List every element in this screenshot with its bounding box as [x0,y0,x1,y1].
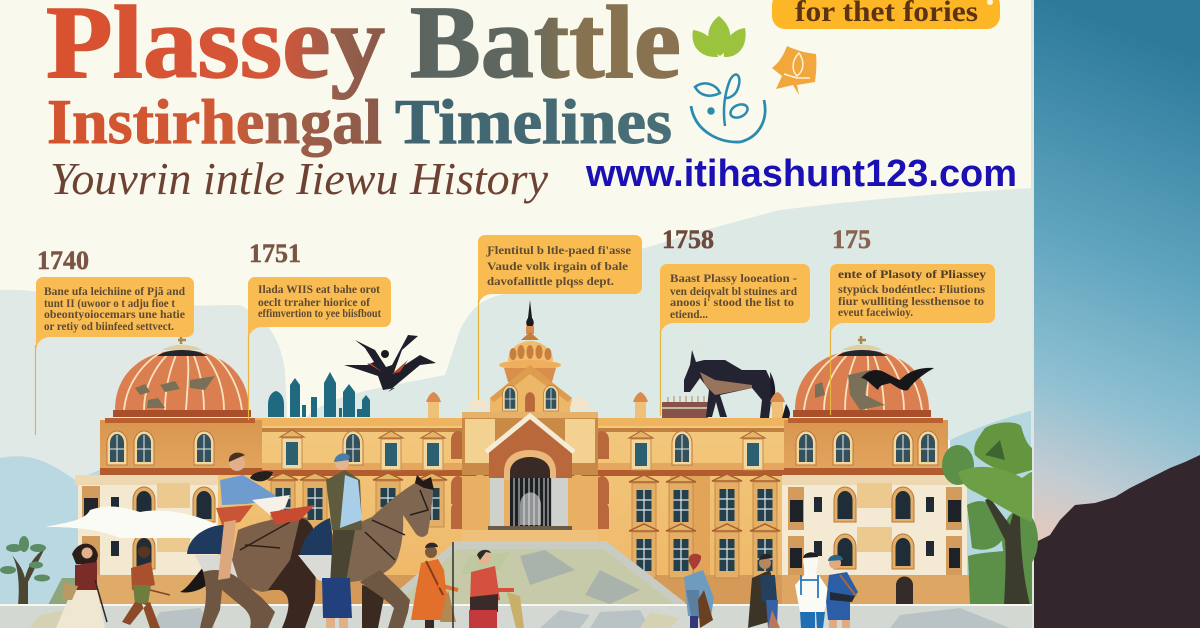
dark dragon bird [344,335,436,392]
callout 1758: ven deiqvalt bl stuines ard [670,284,797,298]
callout 1758: etiend... [670,307,708,321]
callout 1758: anoos i' stood the list to [670,295,794,309]
icon: green leaves [692,16,746,57]
figure: blue outfit man [826,555,858,628]
left dome [113,336,251,417]
callout 1751: effimvertion to yee biisfbout [258,306,381,320]
right lower cream wing [782,484,967,608]
tail [180,565,214,592]
figure: orange robed man [411,542,458,628]
central tower [468,300,590,412]
cupolas [468,396,488,410]
far foliage [942,445,1038,605]
saddle blanket [187,524,228,554]
callout 1751 [248,277,391,420]
central block and portico [462,412,598,542]
upper windows [107,431,127,465]
mane [415,475,434,490]
callout 1758 [660,264,810,416]
rider [220,475,278,505]
figure: bearded man with dark coat [748,554,780,628]
figure: white robed person [795,551,830,628]
horse left with rider [180,453,316,628]
subtitle: Instirhengal Timelines: Timelines [395,86,672,157]
subtitle: Instirhengal Timelines [47,86,672,157]
right green tree [942,422,1038,605]
central wing walls [217,418,790,608]
icon: teal sprout [691,75,765,142]
left upper wing [100,420,262,475]
decorative teal skyline [268,372,370,417]
body [232,517,312,592]
trunk [985,498,1030,605]
rider [326,470,362,530]
callout 1740: Bane ufa leichiine of Pjã and [44,284,185,298]
white cloud [45,506,218,538]
harness [365,490,428,560]
figure: woman in red [469,550,524,628]
top canopy [974,422,1032,476]
belly cloth [195,555,238,590]
callout 175: stypúck bodéntlec: Fliutions [838,282,985,296]
callout 175: fiur wulliting lessthensoe to [838,294,984,308]
callout 1751: oeclt trraher hiorice of [258,295,371,309]
callout 1740: tunt II (uwoor o t adju fioe t [44,296,175,310]
blanket [300,518,335,555]
horse right with rider [298,453,434,628]
year 175: 175 [832,225,871,254]
icon: orange flower [772,46,816,95]
right dome [793,336,931,417]
callout centre [478,235,642,400]
tagline: Youvrin intle Iiewu History [50,153,549,204]
figure: man with bow [122,546,170,628]
callout 1740: or retiy od biinfeed settvect. [44,319,174,333]
stone ground strip [0,604,1032,628]
sunset sky photo panel [1034,0,1200,628]
left lower cream wing [78,484,218,608]
body and neck [332,475,433,582]
black bird over right dome [861,368,934,390]
hind leg [200,570,275,628]
fence behind donkey [662,396,708,418]
small corner towers [426,392,648,418]
subtitle: Instirhengal Timelines: Instirhengal [47,86,382,157]
year 1758: 1758 [662,225,714,254]
year 1740: 1740 [37,246,89,275]
callout centre: Ƒlentitul b ltle-paed fi'asse [486,243,632,257]
palace building [75,300,970,608]
figure: blue coat man [684,554,714,628]
small tower beside donkey [770,392,790,418]
callout 175: eveut faceiwioy. [838,305,913,319]
front leg [360,570,410,628]
callout 1740 [36,277,194,435]
callout 175 [830,264,995,415]
callout 1740: obeontyoiocemars une hatie [44,307,186,321]
website url: www.itihashunt123.com [585,153,1017,195]
ramp with stone wall [398,542,683,606]
callout 1758: Baast Plassy looeation - [670,271,797,285]
year 1751: 1751 [249,239,301,268]
lower windows [268,473,298,527]
right upper wing [784,420,948,475]
callout 175: ente of Plasoty of Pliassey [838,267,986,281]
title: Plassey Battle [46,0,681,100]
dark hill silhouette [1034,455,1200,628]
dark front quarters [268,518,316,628]
callout 1751: Ilada WIIS eat bahe orot [258,282,380,296]
callout centre: Vaude volk irgain of bale [487,259,629,273]
left background tree [0,536,76,605]
callout centre: davofallittle plqss dept. [487,274,614,288]
figure: woman in white skirt [56,544,107,628]
dark donkey [684,327,775,418]
back leg [362,585,385,628]
